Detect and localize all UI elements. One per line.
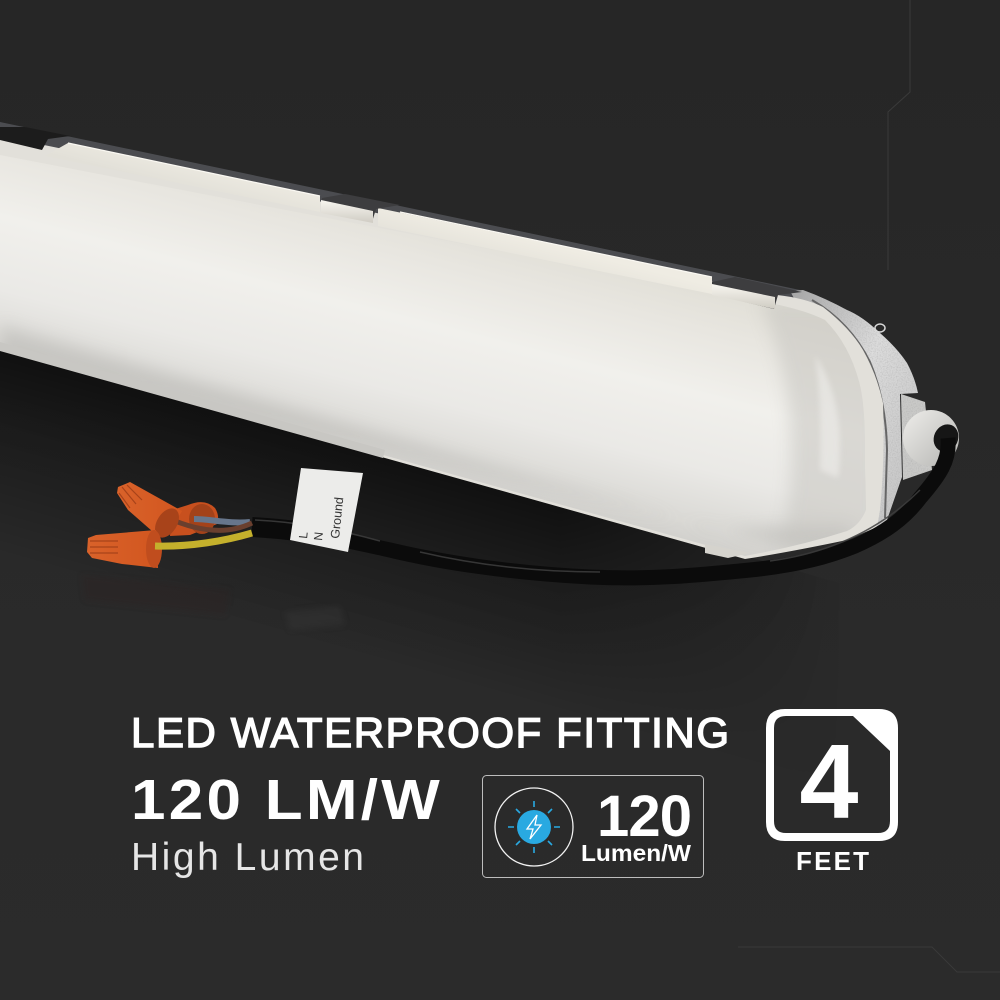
clip middle — [321, 194, 400, 222]
wire connectors — [82, 482, 252, 615]
cap back opening — [189, 504, 215, 534]
lower translucent lip — [0, 342, 385, 458]
cable gland — [901, 394, 963, 480]
fixing loop — [875, 324, 885, 332]
badge: 120 lumen per watt — [482, 776, 704, 878]
heading: efficacy: 120 LM/W — [131, 768, 443, 832]
icon: lumen bolt — [495, 788, 573, 866]
cable label — [290, 468, 363, 552]
cable sheen — [255, 490, 920, 572]
circuit decoration: top right — [888, 0, 910, 270]
thick cable end — [252, 527, 350, 540]
power cable — [252, 438, 948, 578]
metal end cap — [790, 290, 918, 530]
cable label: L — [296, 531, 311, 539]
icon: 4 feet tube — [766, 709, 898, 876]
cable label: Ground — [328, 496, 346, 539]
lower shade — [0, 325, 850, 560]
top rim strip — [45, 143, 320, 212]
feet label: FEET — [796, 846, 869, 876]
clip right — [712, 277, 802, 309]
grey wire — [194, 519, 250, 522]
cable reflection — [285, 606, 345, 630]
dark top rail — [0, 122, 806, 302]
yellow wire — [155, 533, 252, 546]
highlight on end — [817, 364, 840, 476]
subheading: High Lumen — [131, 836, 364, 879]
end cap seam — [812, 300, 887, 518]
dark floor reflection — [0, 351, 751, 634]
right end shade — [765, 304, 866, 532]
bottom tab — [705, 544, 750, 558]
cap top opening — [150, 504, 184, 542]
clip right face — [712, 284, 775, 309]
badge unit: Lumen/W — [581, 840, 691, 866]
circuit decoration: bottom right — [738, 947, 1000, 972]
cap front ridges — [90, 541, 118, 553]
clip middle face — [321, 200, 373, 223]
LED fitting — [0, 122, 918, 560]
orange cap top — [117, 482, 182, 531]
clip left — [0, 127, 70, 150]
numeral 4: 4 — [800, 723, 859, 841]
cap front opening — [146, 530, 162, 568]
diffuser body — [0, 155, 866, 556]
diffuser rim — [0, 136, 884, 559]
badge number: 120 — [597, 784, 692, 849]
top rim strip 2 — [378, 208, 712, 294]
heading: product name: LED WATERPROOF FITTING — [131, 709, 729, 756]
orange cap back — [170, 502, 218, 536]
thin bright edge — [68, 143, 712, 277]
orange cap front — [87, 530, 158, 568]
cap top ridges — [119, 485, 142, 508]
cable label: N — [311, 531, 326, 541]
reflection of connectors — [82, 575, 230, 615]
brown wire — [168, 518, 252, 530]
